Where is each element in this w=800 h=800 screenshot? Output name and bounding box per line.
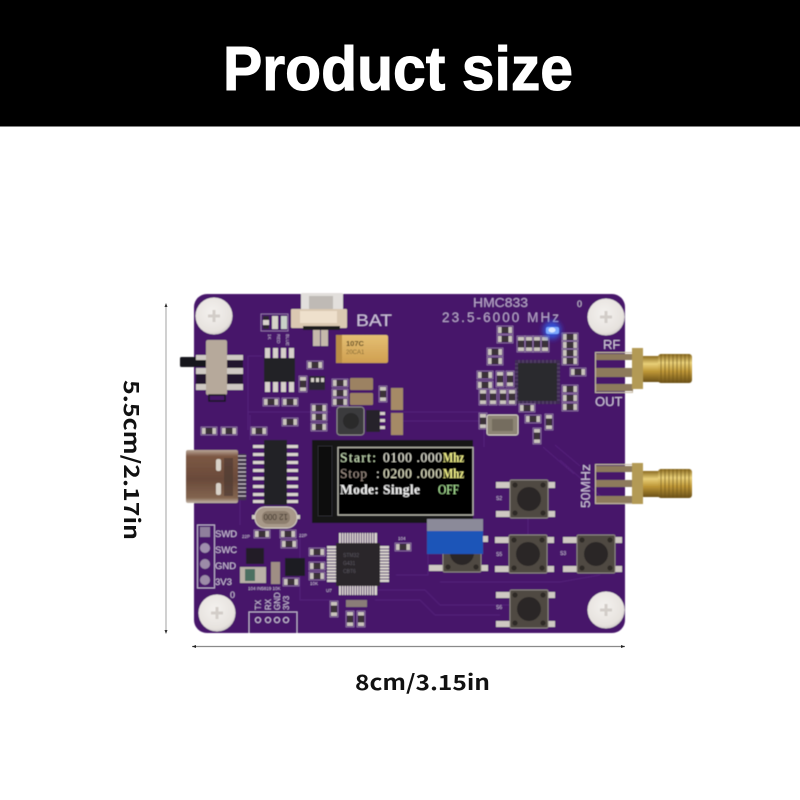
label: 50MHz: 50MHz	[578, 464, 593, 508]
UART header	[249, 592, 297, 633]
label: OUT: OUT	[595, 394, 622, 409]
small capacitors	[350, 378, 403, 435]
OLED line: mode: OFF	[438, 482, 459, 497]
OLED line: mode	[340, 482, 459, 497]
OLED line: stop frequency: Mhz	[443, 466, 464, 481]
width label: 8cm/3.15in	[355, 667, 490, 697]
tantalum capacitor: 20CA1	[346, 350, 365, 356]
mounting screw: top right	[588, 298, 624, 336]
OLED line: stop frequency: 0200 .000	[383, 466, 442, 481]
crystal load and protection parts: 22P	[299, 533, 307, 538]
STM32 microcontroller	[327, 533, 389, 595]
STM32 microcontroller: G431	[343, 561, 355, 567]
OLED line: start frequency: Start:	[340, 450, 376, 465]
OLED line: start frequency	[340, 450, 464, 465]
SOIC-16 chip	[253, 440, 298, 505]
OLED display	[312, 440, 473, 523]
debug header	[198, 525, 237, 588]
STM32 microcontroller: STM32	[343, 553, 359, 559]
crystal load and protection parts	[240, 530, 325, 591]
crystal load and protection parts: 104 IN5819 10K	[248, 586, 281, 591]
push button S6	[496, 590, 555, 628]
USB-C port	[186, 450, 246, 503]
debug header: 3V3	[215, 577, 232, 588]
50 MHz SMA connector	[596, 463, 692, 504]
RF OUT SMA connector	[596, 348, 692, 392]
battery connector	[291, 293, 347, 346]
OLED line: stop frequency	[340, 466, 464, 481]
HMC833 RF chip	[515, 360, 560, 404]
MCU neighbouring parts: U7	[326, 588, 332, 593]
board substrate	[194, 294, 625, 633]
OLED line: start frequency: Mhz	[443, 450, 464, 465]
label: BAT: BAT	[356, 311, 392, 330]
OLED line: stop frequency: Stop	[340, 466, 367, 481]
crystal load and protection parts: 10K	[310, 581, 318, 586]
SOIC-8 chip	[264, 348, 295, 392]
copper traces	[240, 356, 605, 615]
push button S5	[495, 535, 554, 573]
mounting screw: bottom right	[588, 592, 624, 628]
label: RF: RF	[603, 337, 620, 352]
debug header: GND	[215, 561, 236, 572]
UART header: GND	[273, 592, 282, 610]
debug header: SWC	[215, 545, 237, 556]
label: zero, bottom left: 0	[230, 590, 235, 600]
mounting screw: bottom left	[198, 594, 236, 632]
OLED line: mode: Mode: Single	[340, 482, 420, 497]
button labels	[496, 496, 566, 611]
button labels: S3	[560, 551, 566, 557]
status LEDs: RED	[276, 334, 281, 344]
RF section passives	[477, 326, 586, 444]
OLED line: stop frequency: :	[376, 466, 380, 481]
MCU neighbouring parts: 104	[398, 536, 406, 541]
height label: 5.5cm/2.17in	[117, 380, 147, 540]
title band	[0, 0, 800, 126]
push button S3	[563, 535, 622, 573]
blue LED	[543, 321, 561, 339]
status LEDs: 1K	[267, 334, 272, 340]
UART header: TX	[254, 599, 263, 610]
label: frequency range: 23.5-6000 MHz	[442, 310, 559, 325]
UART header: RX	[264, 598, 273, 610]
status LEDs	[261, 314, 290, 346]
tantalum capacitor	[336, 335, 388, 363]
mounting screw: top left	[196, 298, 232, 334]
status LEDs: BLUE	[285, 334, 290, 346]
label: HMC833: HMC833	[473, 295, 528, 310]
slide power switch	[180, 340, 243, 401]
bottom-centre push button	[429, 534, 488, 572]
OLED line: start frequency: 0100 .000	[383, 450, 442, 465]
power inductor	[337, 407, 364, 435]
debug header: SWD	[215, 529, 237, 540]
button labels: S2	[496, 496, 502, 502]
STM32 microcontroller: CBT6	[343, 569, 356, 575]
title band: Product size	[223, 35, 573, 104]
crystal load and protection parts: 22P	[242, 534, 250, 539]
MCU neighbouring parts	[326, 536, 411, 627]
height dimension arrow	[164, 303, 168, 634]
button labels: S6	[496, 605, 502, 611]
circuit board	[180, 293, 692, 633]
button labels: S5	[496, 552, 502, 558]
power section passives	[201, 361, 387, 435]
reference oscillator	[487, 415, 518, 435]
tantalum capacitor: 107C	[346, 339, 365, 348]
label: zero, top right: 0	[577, 299, 582, 309]
12 MHz crystal	[252, 507, 300, 528]
blue potentiometer	[427, 519, 483, 554]
width dimension arrow	[192, 645, 625, 648]
UART header: 3V3	[282, 595, 291, 610]
push button S2	[496, 480, 555, 518]
12 MHz crystal: 12 000	[263, 512, 288, 521]
